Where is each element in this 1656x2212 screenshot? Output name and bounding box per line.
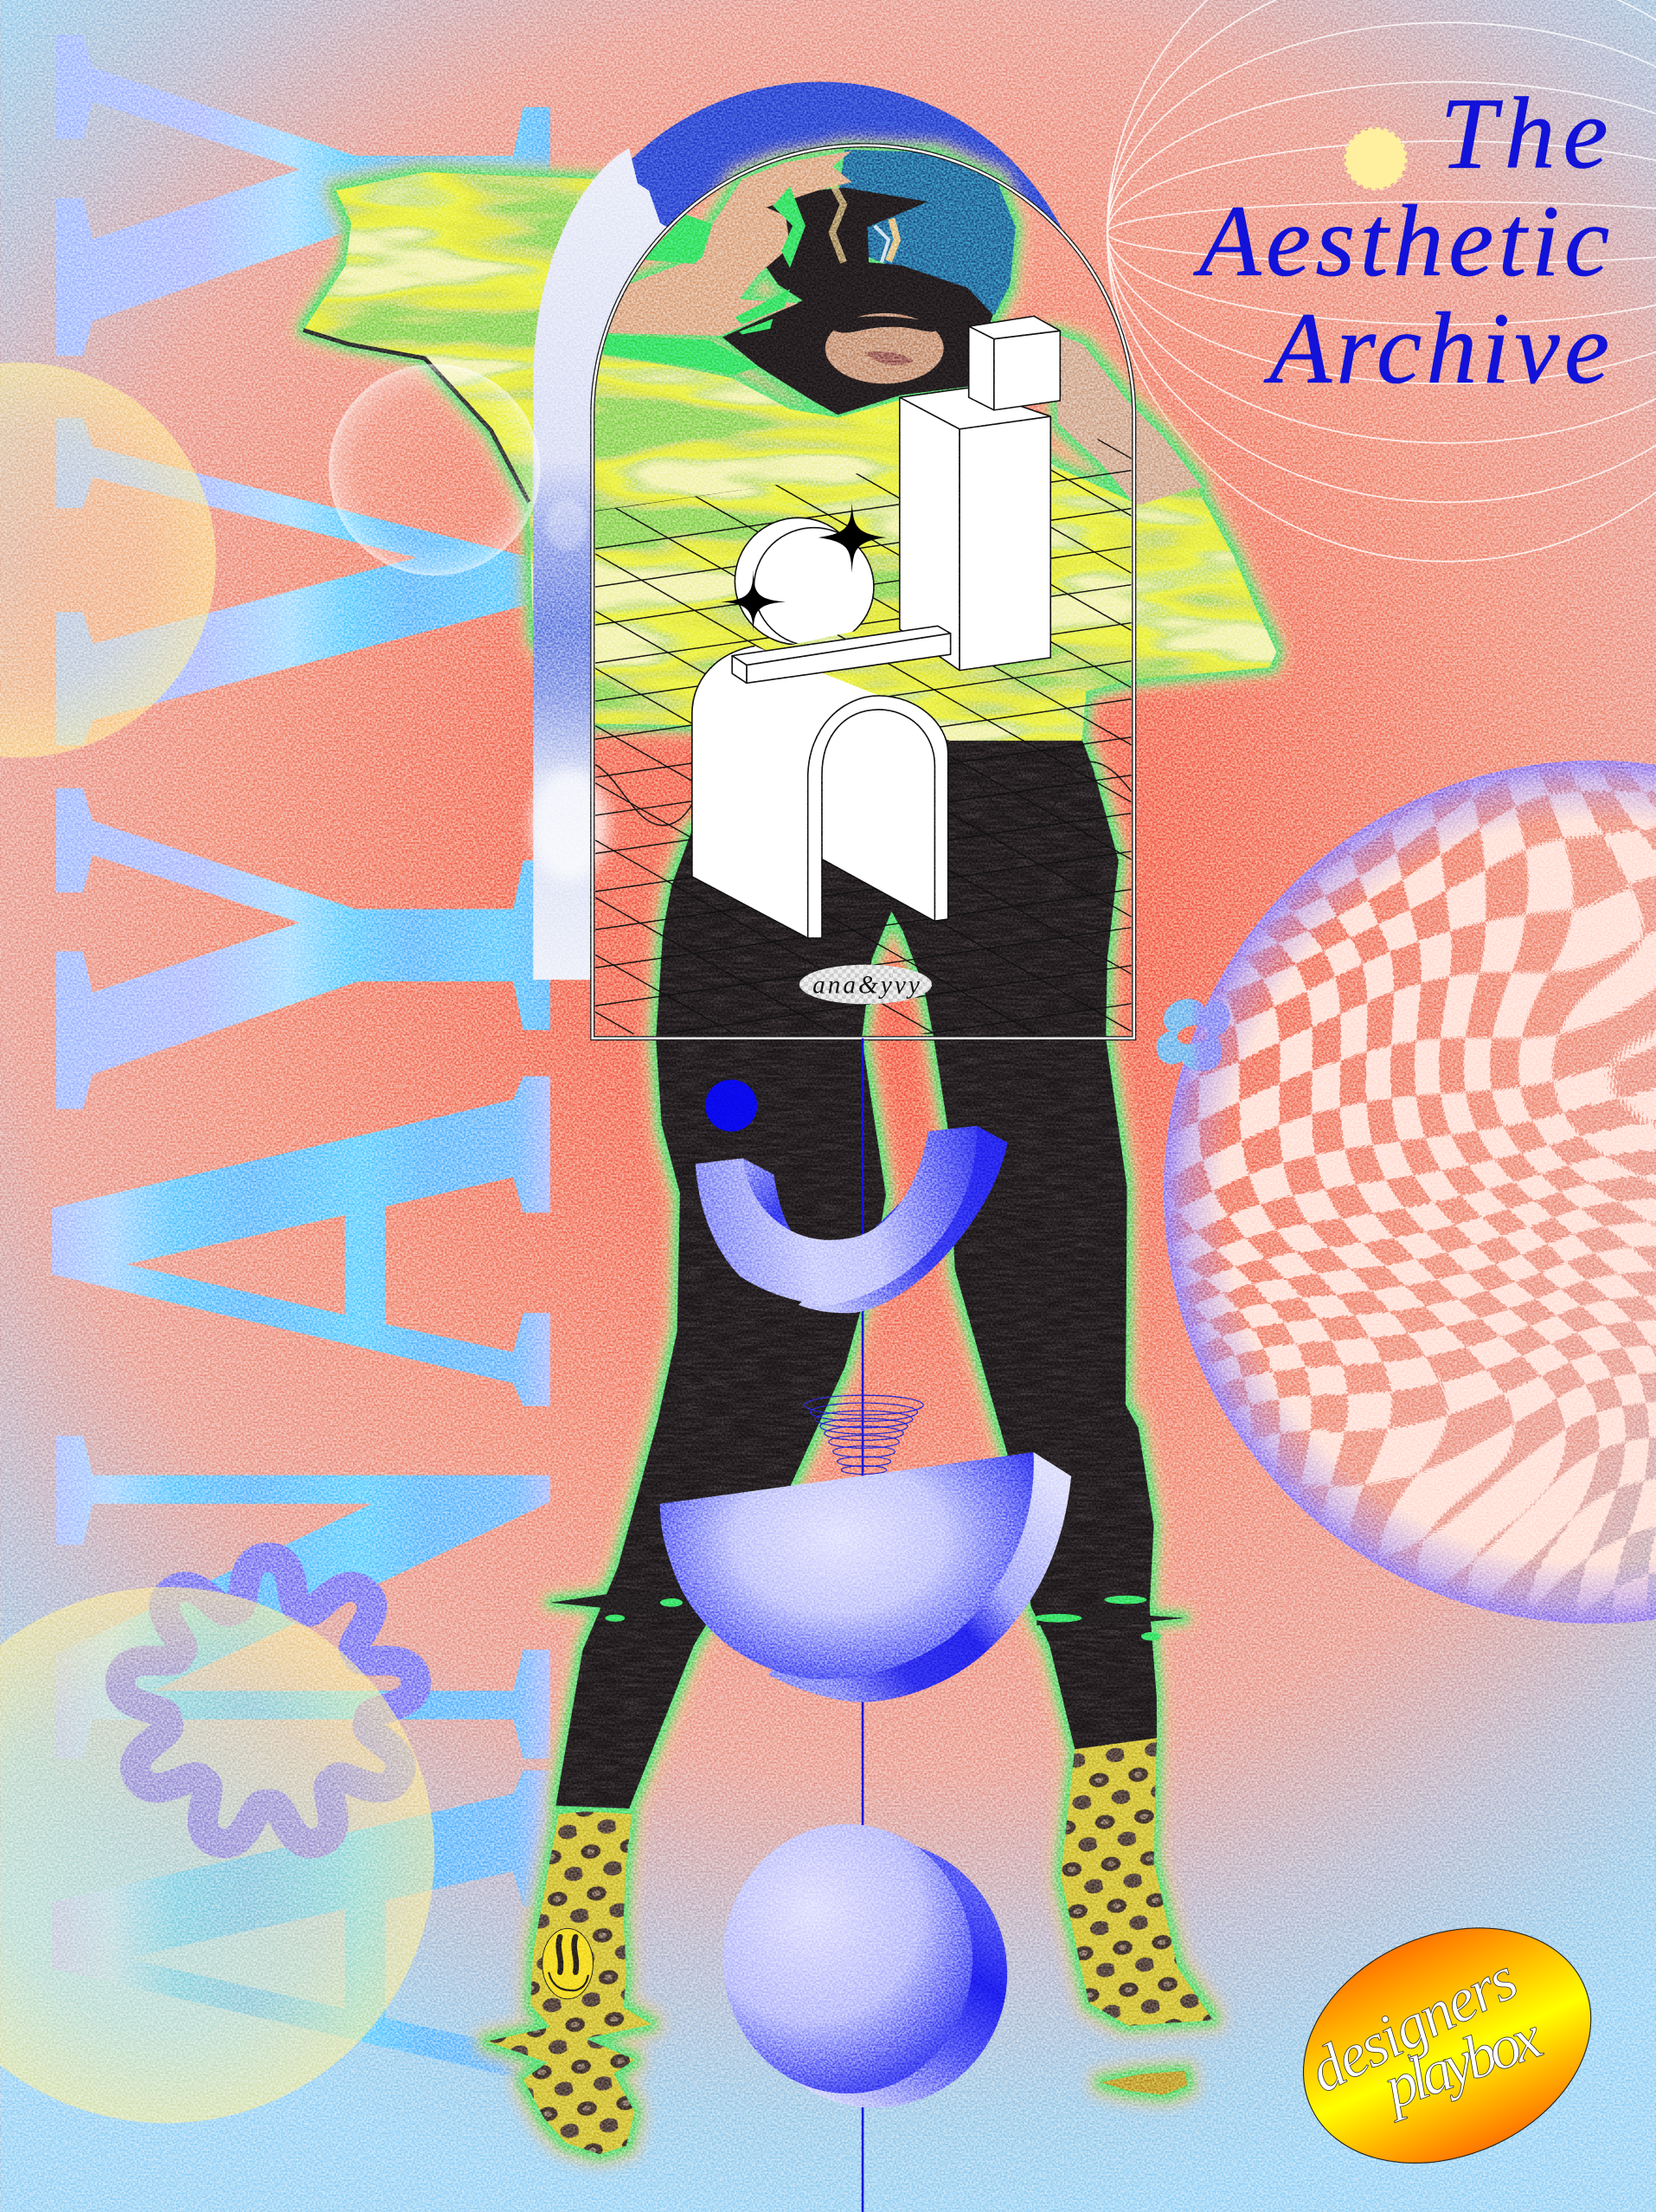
white bubble: [329, 364, 540, 576]
small clover: [1157, 999, 1230, 1071]
wire cone: [805, 1395, 923, 1474]
lower sphere: [723, 1824, 1007, 2107]
cloud arch panel: [530, 148, 667, 980]
blue dot: [705, 1080, 757, 1132]
right forearm: [1051, 331, 1202, 508]
name pill label: [799, 965, 932, 1004]
blue hat: [838, 150, 1016, 315]
shirt: [304, 172, 1276, 741]
vertical title letters: [0, 26, 714, 2105]
knee glitch, right: [1037, 1610, 1184, 1625]
right boot: [1061, 1738, 1213, 2026]
sine wave: [595, 759, 1131, 826]
isometric grid: [595, 153, 1131, 1318]
sculpture ball: [735, 518, 874, 646]
white arch sculpture: [692, 646, 948, 938]
title line: Archive: Archive: [1263, 293, 1609, 405]
main title: [1193, 77, 1609, 405]
face: [825, 313, 944, 383]
badge text: playbox: playbox: [1370, 2002, 1550, 2124]
title line: The: The: [1440, 77, 1608, 190]
badge text: designers: designers: [1298, 1943, 1528, 2106]
orange badge: [1266, 1884, 1628, 2207]
blue vertical axis line: [862, 1038, 863, 2212]
name pill label: ana&yvy: [812, 972, 921, 1000]
top cube: [969, 316, 1060, 410]
title line: Aesthetic: Aesthetic: [1193, 185, 1609, 298]
sparkle large: [818, 502, 886, 573]
hair: [722, 188, 993, 415]
wireframe globe: [1107, 0, 1656, 562]
pants: [555, 734, 1157, 1809]
half dome: [660, 1452, 1071, 1702]
crescent shape: [696, 1126, 1008, 1313]
heel sliver: [1101, 2071, 1188, 2095]
hair glitch bands: [304, 183, 897, 502]
left boot: [487, 1811, 651, 2154]
yellow translucent circle, left: [0, 363, 216, 757]
checker sphere: [1164, 760, 1656, 1624]
yellow translucent circle, bottom left: [0, 1587, 434, 2123]
wavy ring: [114, 1558, 421, 1854]
smiley sticker: [542, 1928, 593, 1999]
horizontal bar: [732, 626, 951, 683]
knee glitch, left: [550, 1588, 691, 1617]
person collage: [304, 150, 1276, 2154]
arch frame: [593, 145, 1134, 1038]
blue disc behind arch: [632, 81, 1062, 228]
tall block: [900, 388, 1050, 671]
hand and arm: [600, 151, 852, 336]
green hand accents: [604, 186, 1161, 1641]
scalloped sun: [1346, 129, 1405, 189]
sparkle small: [721, 570, 786, 633]
